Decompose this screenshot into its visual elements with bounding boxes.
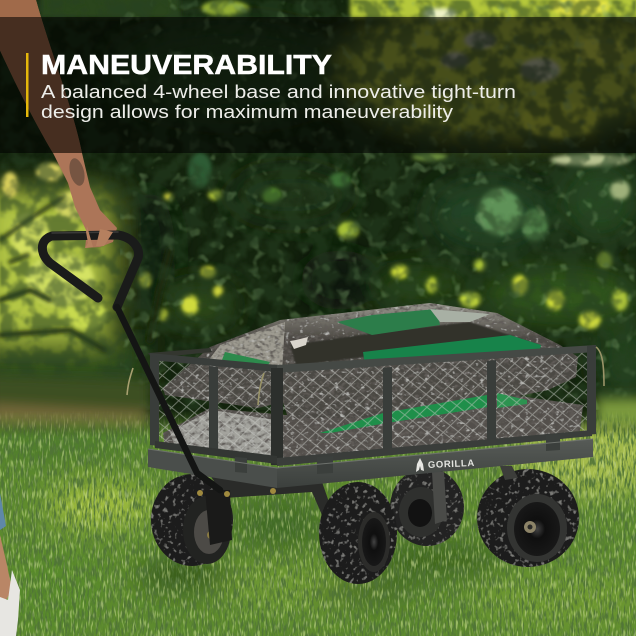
wagon: rear right wheel — [477, 466, 579, 567]
bottom mulch bag — [163, 393, 583, 462]
dark branches — [0, 198, 170, 350]
description text: design allows for maximum maneuverability — [41, 101, 454, 122]
wagon: wire mesh side panels — [155, 349, 592, 463]
photo background: ground and lawn — [0, 375, 636, 636]
wagon: Gorilla brand logo: GORILLA — [428, 458, 475, 471]
dark header band — [0, 17, 636, 153]
cargo: mulch bags — [163, 303, 583, 462]
accent bar — [26, 53, 28, 117]
wagon: steel rails and posts — [148, 345, 596, 466]
description text: A balanced 4-wheel base and innovative tight-turn — [41, 81, 516, 102]
wagon: front axle and steering bracket — [197, 472, 330, 545]
wagon: pull handle — [42, 232, 220, 490]
title: MANEUVERABILITY — [41, 49, 332, 80]
green bag labels — [337, 309, 440, 335]
wagon: deck front face — [148, 434, 593, 488]
wagon: middle wheel — [319, 482, 397, 584]
wagon: front left wheel — [151, 474, 233, 566]
top strip highlights — [2, 0, 636, 329]
wagon: back wheel far side — [390, 468, 464, 546]
top mulch bag — [163, 303, 578, 418]
leaf texture shadow — [0, 0, 636, 410]
leaf texture — [120, 0, 636, 410]
person: fingers over handle — [85, 226, 113, 248]
wagon: bungee latches — [127, 347, 604, 405]
person: leg and shoe — [0, 493, 20, 636]
person: arm with tattoo and hand — [0, 0, 117, 248]
